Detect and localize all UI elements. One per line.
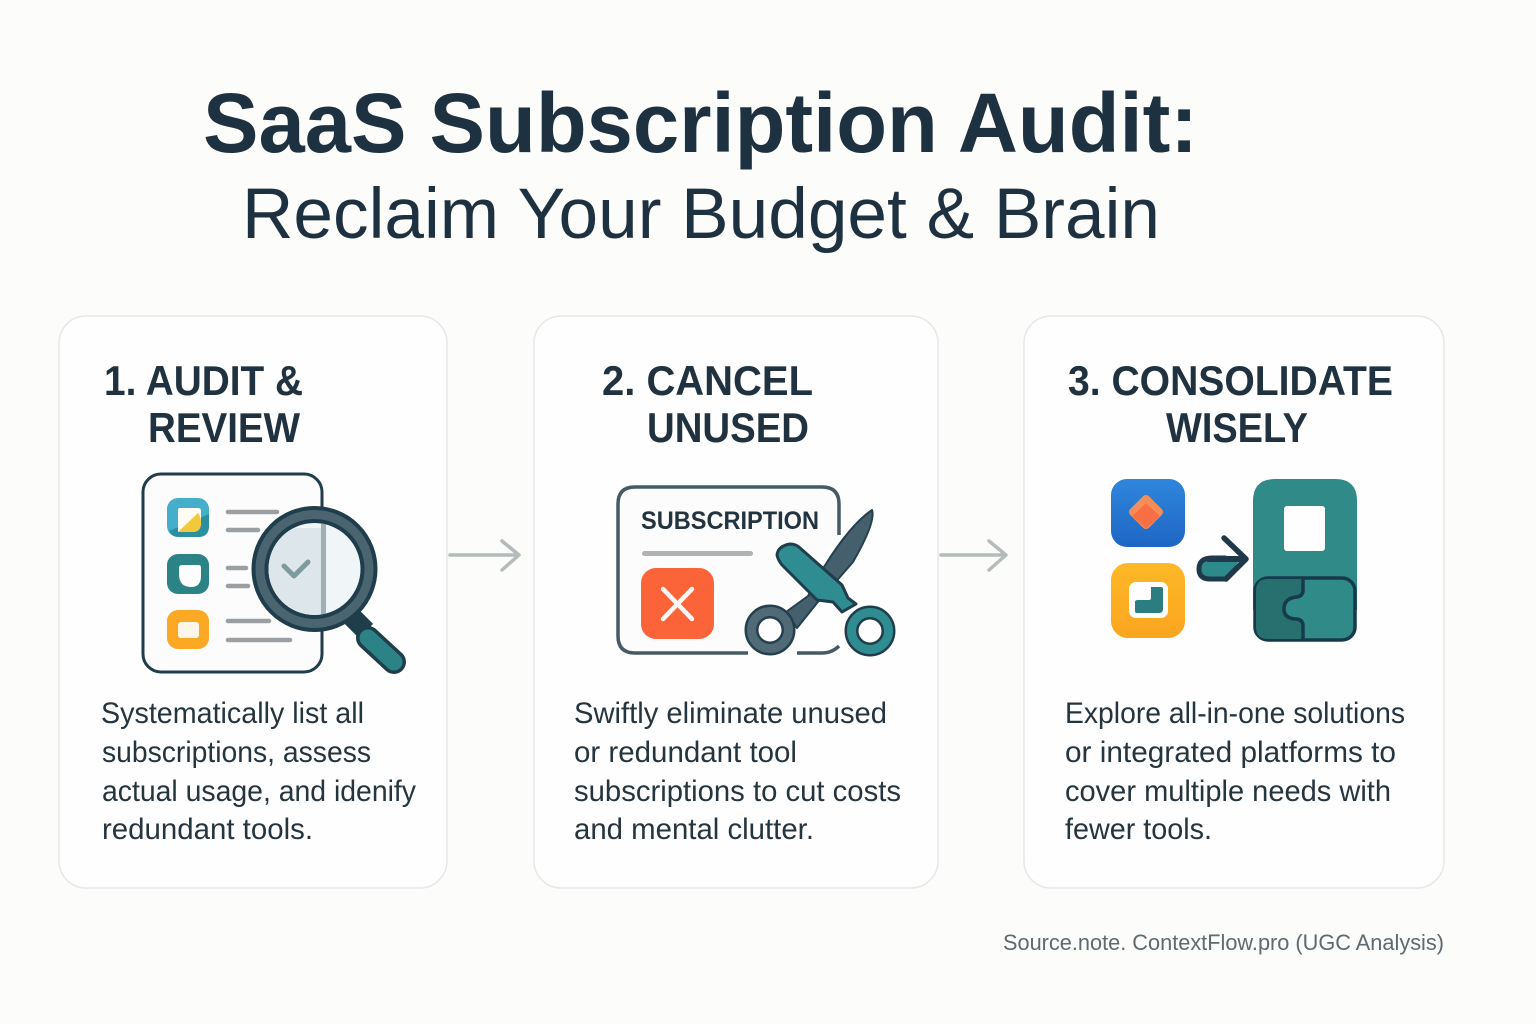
source note: Source.note. ContextFlow.pro (UGC Analysis) <box>1003 930 1444 955</box>
merge arrow <box>1197 538 1246 579</box>
body text: consolidate: or integrated platforms to <box>1065 736 1396 769</box>
heading: consolidate wisely <box>1068 357 1393 451</box>
body text: consolidate: cover multiple needs with <box>1065 775 1391 808</box>
body text: cancel <box>574 697 901 846</box>
icon: checklist with magnifier <box>143 474 394 672</box>
body text: audit: subscriptions, assess <box>102 736 371 769</box>
cancel badge <box>641 568 714 639</box>
body text: consolidate: Explore all-in-one solutions <box>1065 697 1405 730</box>
title line 1: SaaS Subscription Audit: <box>203 76 1198 170</box>
magnifier lens <box>254 508 376 630</box>
panel: consolidate wisely <box>1024 316 1444 888</box>
heading: audit and review: REVIEW <box>148 404 300 451</box>
magnifier handle <box>345 610 394 662</box>
body text: cancel: and mental clutter. <box>574 813 814 846</box>
panel: cancel unused <box>534 316 938 888</box>
arrow: step 1 to step 2 <box>450 541 519 570</box>
arrow: step 2 to step 3 <box>941 541 1006 570</box>
body text: consolidate <box>1065 697 1405 846</box>
body text: audit: redundant tools. <box>102 813 313 846</box>
body text: audit <box>101 697 416 846</box>
heading: audit and review <box>104 357 303 451</box>
body text: cancel: subscriptions to cut costs <box>574 775 901 808</box>
scissors <box>752 510 888 650</box>
panel: audit and review <box>59 316 447 888</box>
heading: cancel unused: UNUSED <box>647 404 809 451</box>
title <box>203 76 1198 254</box>
blue app tile <box>1111 479 1185 547</box>
heading: cancel unused <box>602 357 813 451</box>
body text: consolidate: fewer tools. <box>1065 813 1212 846</box>
icon: subscription card with scissors <box>618 487 888 653</box>
body text: cancel: Swiftly eliminate unused <box>574 697 887 730</box>
body text: audit: Systematically list all <box>101 697 364 730</box>
platform block <box>1253 479 1357 640</box>
heading: consolidate wisely: WISELY <box>1166 404 1308 451</box>
title line 2: Reclaim Your Budget & Brain <box>242 175 1160 254</box>
subscription label: SUBSCRIPTION <box>641 507 819 535</box>
heading: consolidate wisely: 3. CONSOLIDATE <box>1068 357 1393 404</box>
heading: audit and review: 1. AUDIT & <box>104 357 303 404</box>
icon: tools merging into one platform <box>1111 479 1357 640</box>
body text: audit: actual usage, and idenify <box>102 775 416 808</box>
heading: cancel unused: 2. CANCEL <box>602 357 813 404</box>
body text: cancel: or redundant tool <box>574 736 797 769</box>
yellow app tile <box>1111 563 1185 638</box>
